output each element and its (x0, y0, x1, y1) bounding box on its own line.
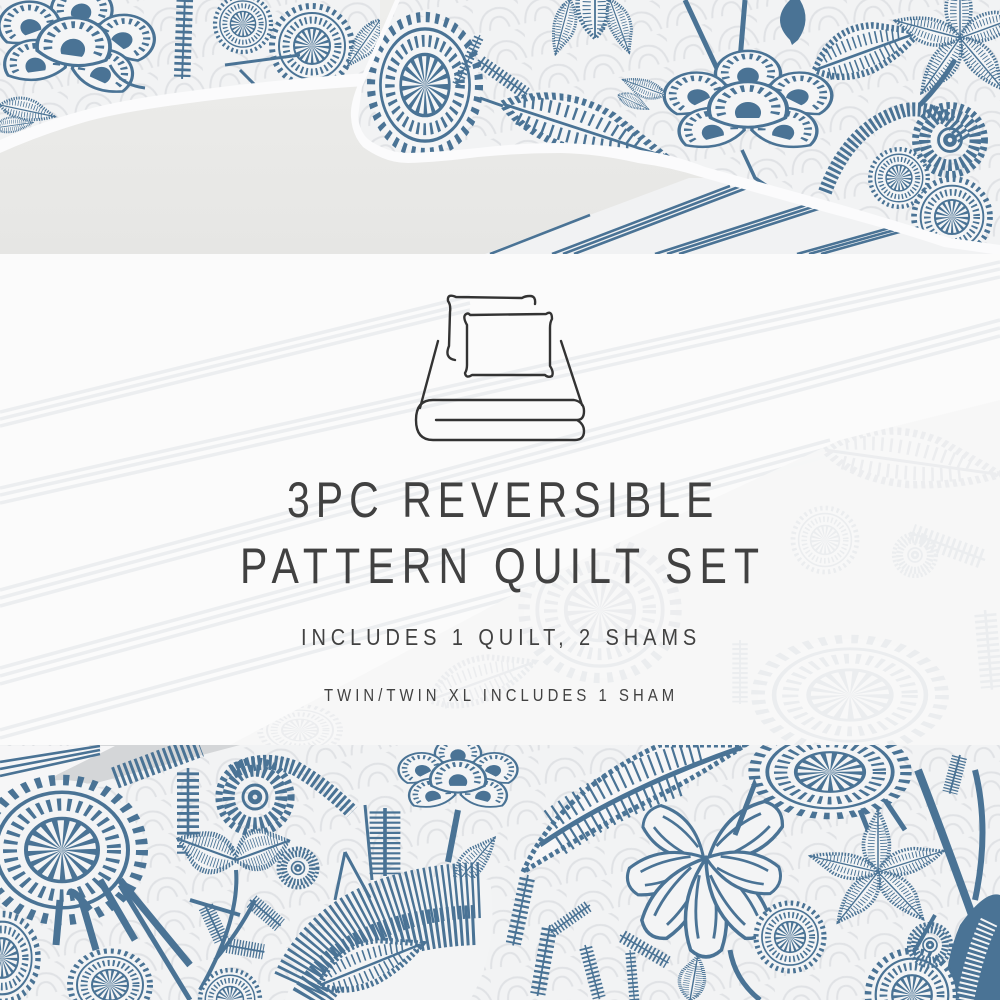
heading line 1: 3PC REVERSIBLE (287, 472, 713, 528)
panel: white text band (0, 254, 1000, 754)
subheading: INCLUDES 1 QUILT, 2 SHAMS (301, 623, 696, 650)
peony at corner (371, 17, 479, 153)
big lily flower (623, 770, 790, 1000)
fern and curl (187, 768, 189, 856)
curled vine (825, 109, 965, 192)
left pillow sham (0, 0, 390, 153)
heading line 2: PATTERN QUILT SET (240, 538, 759, 594)
top flower (397, 745, 519, 808)
panel: bottom bedding photo (0, 728, 1000, 1000)
top flowers (578, 0, 609, 38)
ferns lower (513, 875, 528, 945)
big fan flower (662, 50, 834, 148)
faint stripes (0, 262, 1000, 738)
butterfly flower (176, 831, 237, 874)
bottom left flowers (70, 951, 150, 1000)
star flower (893, 0, 1000, 100)
serrated leaf (500, 92, 670, 156)
fern sprig (478, 60, 527, 94)
right vine (868, 755, 1000, 1000)
large flower left (0, 780, 190, 965)
panel: top bedding photo (0, 0, 1000, 255)
white sheet (0, 0, 1000, 255)
faint folded floral (257, 427, 1000, 745)
shadow under corner (55, 745, 240, 784)
thistle (285, 850, 492, 1000)
quilt base (0, 745, 1000, 1000)
right pillow sham (351, 0, 1000, 255)
icon: folded quilt with pillows (416, 296, 584, 440)
band background (0, 254, 1000, 745)
striped quilt corner (485, 178, 1000, 254)
note: TWIN/TWIN XL INCLUDES 1 SHAM (324, 686, 674, 705)
front pillow (464, 313, 553, 377)
back pillow (447, 296, 535, 360)
small leaf (812, 22, 916, 80)
top right flower (754, 728, 906, 816)
folded quilt (416, 341, 584, 440)
star leaf (808, 812, 946, 929)
round flower (756, 903, 824, 971)
feather leaf (523, 745, 745, 872)
